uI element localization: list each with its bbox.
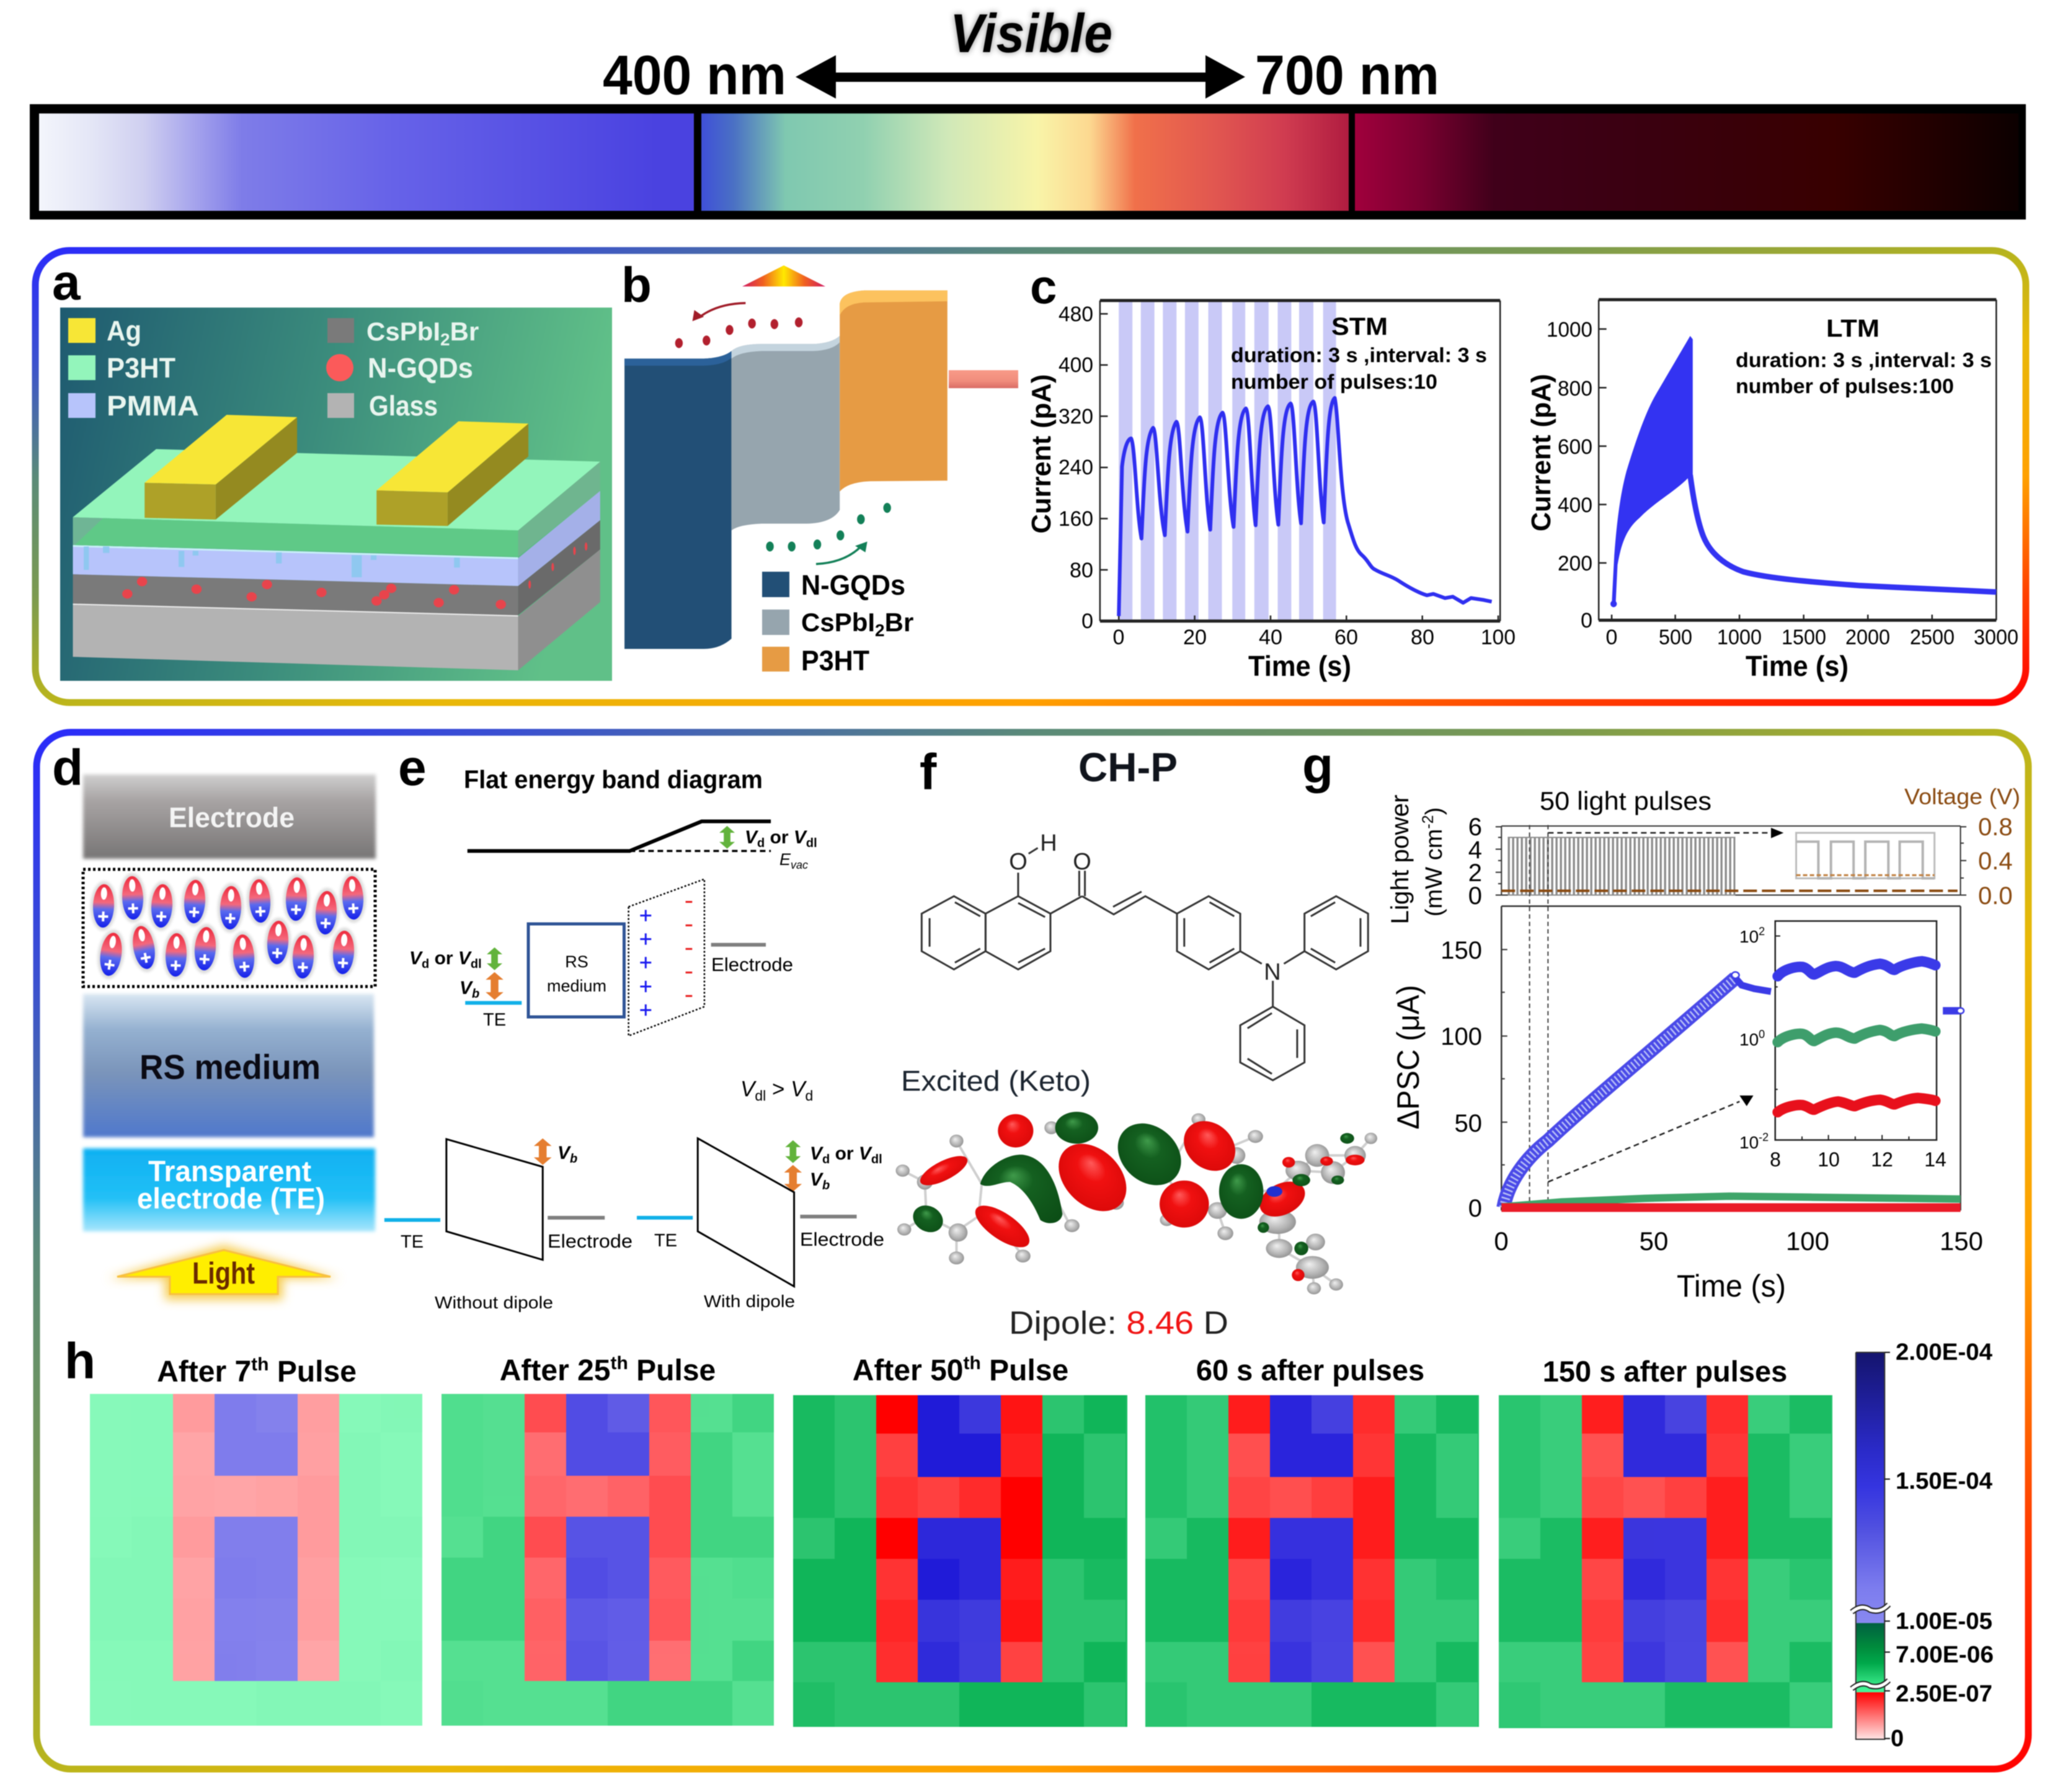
legend a: Br: [450, 317, 479, 346]
LTM chart: 800: [1558, 377, 1592, 401]
molecular structure: N: [1264, 959, 1281, 985]
light pulse chart: 4: [1468, 836, 1482, 864]
colour bar: 0: [1891, 1726, 1904, 1752]
label: Vd or Vdl left: V: [458, 948, 473, 969]
PSC chart: 50: [1640, 1226, 1668, 1256]
inset chart: 10: [1739, 1030, 1759, 1049]
icon: light arrow: [109, 1245, 339, 1300]
label: Vd or Vdl top: V: [794, 827, 808, 848]
inset chart: 14: [1924, 1148, 1946, 1171]
label: RS medium: RS: [565, 952, 588, 971]
legend a: [68, 315, 479, 422]
colour bar: 1.50E-04: [1896, 1468, 1992, 1494]
colour bar: 7.00E-06: [1896, 1642, 1994, 1668]
label: medium: medium: [547, 977, 606, 995]
LTM chart: 500: [1659, 626, 1692, 649]
LTM chart: 400: [1558, 494, 1592, 517]
label: Vdl > Vd: d: [806, 1088, 813, 1104]
legend b: Br: [885, 608, 913, 637]
heatmap: after 7th pulse: After 7: [157, 1355, 251, 1388]
title: Visible: Visible: [950, 2, 1112, 64]
label: Vd or Vdl top: d: [757, 836, 765, 850]
LTM chart: 600: [1558, 435, 1592, 459]
STM chart: Current (pA): [1026, 375, 1057, 533]
legend b: CsPbI: [801, 608, 875, 637]
label: Excited (Keto): Excited (Keto): [901, 1065, 1091, 1097]
heatmap: 60 s after pulses: 60 s after pulses: [1196, 1354, 1424, 1386]
LTM chart: LTM: [1826, 315, 1880, 342]
legend a: Glass: [369, 390, 438, 422]
legend b: N-GQDs: [801, 569, 905, 601]
LTM chart: Time (s): [1746, 650, 1849, 682]
spectrum bar: [30, 104, 2026, 220]
panel h: heatmaps: [64, 1333, 1994, 1752]
molecular structure: O: [1073, 849, 1091, 875]
spectrum header: [30, 2, 2026, 220]
panel frame: d-h: [37, 732, 2028, 1769]
PSC chart: 150: [1940, 1226, 1983, 1256]
heatmap: 150 s after pulses: 150 s after pulses: [1543, 1355, 1787, 1388]
STM chart: 480: [1059, 303, 1093, 326]
layer: electrode: [83, 774, 376, 859]
STM chart: [1026, 301, 1516, 682]
legend b: 2: [875, 621, 885, 640]
label: Vd or Vdl right: d: [822, 1153, 830, 1166]
layer: transparent electrode: [83, 1148, 375, 1231]
PSC chart: [1391, 825, 1983, 1303]
layer: transparent electrode: electrode (TE): [137, 1182, 325, 1215]
title: CH-P: CH-P: [1078, 744, 1178, 790]
light pulse chart: Light power: [1387, 794, 1414, 925]
LTM chart: 1000: [1547, 318, 1592, 342]
inset chart: 10: [1818, 1148, 1840, 1171]
LTM chart: Current (pA): [1526, 374, 1556, 531]
LTM chart: 200: [1558, 552, 1592, 575]
label: Vb without dipole: b: [570, 1152, 577, 1166]
light pulse chart: (mW cm: [1421, 829, 1447, 916]
heading e: e: [398, 740, 427, 796]
heatmap: after 25th pulse: th: [610, 1353, 628, 1373]
light pulse chart: 0.4: [1978, 848, 2013, 875]
inset chart: -2: [1759, 1131, 1769, 1143]
panel b: band diagram: [621, 257, 1018, 676]
colour bar: 2.00E-04: [1896, 1339, 1992, 1365]
light beam stub: [949, 370, 1018, 388]
heading f: f: [920, 744, 937, 801]
label: 400 nm: 400 nm: [603, 45, 786, 107]
heatmap: after 50th pulse: After 50: [853, 1354, 964, 1387]
label: 700 nm: 700 nm: [1255, 45, 1439, 107]
layer: RS medium: [83, 994, 374, 1137]
STM chart: 80: [1411, 626, 1434, 649]
LTM chart: 2000: [1845, 626, 1890, 649]
PSC chart: Time (s): [1677, 1269, 1786, 1303]
label: Vd or Vdl top: or: [765, 827, 794, 848]
STM chart: STM: [1331, 313, 1388, 340]
inset chart: 12: [1871, 1148, 1893, 1171]
LTM chart: 1000: [1717, 626, 1762, 649]
inset chart: 0: [1759, 1028, 1765, 1040]
legend b: P3HT: [801, 645, 869, 676]
arrow: visible range: [796, 55, 1245, 99]
heatmap: after 7th pulse: [90, 1354, 422, 1726]
heatmap: 60 s after pulses: [1145, 1354, 1479, 1727]
heading h: h: [64, 1333, 95, 1390]
label: Vd or Vdl left: dl: [471, 957, 482, 971]
light pulse chart: 0.0: [1978, 882, 2013, 910]
heatmap: after 7th pulse: Pulse: [269, 1355, 357, 1388]
heatmap: after 50th pulse: [793, 1353, 1127, 1727]
STM chart: duration: 3 s ,interval: 3 s: [1231, 344, 1487, 366]
label: TE middle: TE: [483, 1010, 506, 1030]
label: TE left: TE: [401, 1232, 424, 1252]
label: Electrode right: Electrode: [800, 1228, 884, 1250]
heatmap: after 50th pulse: th: [964, 1353, 981, 1373]
heatmap: 150 s after pulses: [1499, 1355, 1832, 1728]
heatmap: after 50th pulse: Pulse: [981, 1354, 1068, 1387]
STM chart: 0: [1081, 610, 1093, 633]
inset chart: 2: [1759, 925, 1765, 938]
LTM chart: 3000: [1974, 626, 2018, 649]
3D device stack: [73, 415, 600, 670]
inset chart: 10: [1739, 1133, 1759, 1152]
LTM chart: 0: [1606, 626, 1617, 649]
heading b: b: [621, 257, 652, 313]
STM chart: 400: [1059, 353, 1093, 377]
STM chart: 60: [1334, 626, 1358, 649]
STM chart: 0: [1113, 626, 1124, 649]
STM chart: 320: [1059, 405, 1093, 428]
molecular structure: [921, 830, 1368, 1080]
STM chart: 160: [1059, 507, 1093, 531]
heatmap: after 25th pulse: After 25: [500, 1354, 610, 1387]
label: Vd or Vdl right: V: [859, 1143, 873, 1164]
diagram shapes: [384, 822, 856, 1287]
label: Vd or Vdl top: dl: [806, 836, 817, 850]
label: Evac: vac: [791, 859, 808, 871]
inset chart: [1739, 921, 1946, 1171]
label: Vd or Vdl right: or: [830, 1143, 859, 1164]
label: Vd or Vdl top: V: [745, 827, 759, 848]
light pulse chart: [1387, 784, 2020, 924]
STM chart: 240: [1059, 456, 1093, 479]
heatmap: after 25th pulse: [442, 1353, 774, 1726]
label: Vd or Vdl left: or: [429, 948, 458, 969]
light pulse chart: ): [1421, 807, 1447, 815]
light pulse chart: 2: [1468, 859, 1482, 887]
legend a: Ag: [107, 315, 141, 347]
device background: [60, 308, 612, 681]
label: Vd or Vdl right: V: [810, 1143, 824, 1164]
heading c: c: [1030, 259, 1057, 314]
light pulse chart: 50 light pulses: [1540, 786, 1711, 815]
layer: transparent electrode: Transparent: [148, 1155, 311, 1187]
STM chart: Time (s): [1248, 650, 1351, 682]
PSC chart: 100: [1440, 1023, 1482, 1050]
layer: RS medium: RS medium: [140, 1047, 321, 1086]
light pulse chart: 6: [1468, 814, 1482, 841]
panel g: PSC chart: [1302, 737, 2020, 1303]
label: Vd or Vdl left: d: [422, 957, 429, 971]
label: TE right: TE: [654, 1231, 677, 1251]
light pulse chart: 0.8: [1978, 814, 2013, 841]
caption: Without dipole: Without dipole: [435, 1293, 553, 1312]
heading: flat energy band diagram: Flat energy band diagram: [464, 765, 763, 794]
label: Vb left: V: [459, 978, 472, 998]
legend a: N-GQDs: [368, 352, 473, 384]
PSC chart: ΔPSC (μA): [1391, 985, 1426, 1130]
PSC chart: 0: [1468, 1195, 1482, 1222]
label: Vdl > Vd: V: [791, 1077, 807, 1101]
colour bar: [1852, 1339, 1994, 1752]
label: Vdl > Vd: V: [740, 1077, 757, 1101]
legend b: [762, 569, 913, 676]
label: Vdl > Vd: >: [766, 1077, 791, 1101]
STM chart: 40: [1259, 626, 1282, 649]
icon: light arrow: Light: [192, 1257, 255, 1290]
inset chart: 10: [1739, 927, 1759, 946]
label: Electrode left: Electrode: [548, 1230, 632, 1252]
heatmap: after 7th pulse: th: [251, 1354, 269, 1375]
colour bar: 2.50E-07: [1896, 1681, 1992, 1707]
heading d: d: [52, 740, 83, 796]
PSC chart: 100: [1786, 1226, 1829, 1256]
PSC chart: 150: [1440, 937, 1482, 964]
legend a: 2: [440, 330, 450, 349]
label: Vb left: b: [472, 987, 479, 1001]
LTM chart: [1526, 299, 2018, 682]
layer: dipoles: [83, 869, 375, 987]
energy bands: [624, 290, 948, 649]
LTM chart: 2500: [1910, 626, 1955, 649]
LTM chart: 0: [1581, 609, 1592, 632]
legend a: CsPbI: [366, 317, 440, 346]
molecular structure: H: [1040, 830, 1057, 856]
label: Electrode middle: Electrode: [711, 954, 793, 975]
panel d: device stack with dipoles: [52, 740, 376, 1300]
panel f: molecule: [895, 744, 1377, 1341]
LTM chart: duration: 3 s ,interval: 3 s: [1736, 348, 1992, 371]
STM chart: 20: [1183, 626, 1207, 649]
heading a: a: [52, 254, 81, 311]
label: Vdl > Vd: dl: [755, 1088, 766, 1104]
caption: With dipole: With dipole: [704, 1292, 795, 1311]
layer: electrode: Electrode: [169, 802, 295, 833]
label: dipole value: Dipole: 8.46 D: [1009, 1305, 1228, 1341]
PSC chart: 0: [1494, 1226, 1509, 1256]
label: Vb right: V: [810, 1169, 822, 1190]
heatmap: after 25th pulse: Pulse: [628, 1354, 716, 1387]
light pulse chart: 0: [1468, 882, 1482, 910]
LTM chart: number of pulses:100: [1736, 375, 1954, 397]
panel a: device structure: [52, 254, 612, 681]
inset chart: 8: [1770, 1148, 1781, 1171]
light pulse chart: Voltage (V): [1904, 784, 2020, 809]
label: Vd or Vdl left: V: [409, 948, 424, 969]
label: Vd or Vdl right: dl: [871, 1153, 882, 1166]
legend a: P3HT: [107, 352, 175, 384]
light triangle: [742, 265, 825, 286]
panel c: STM and LTM charts: [1026, 259, 2018, 682]
heading g: g: [1302, 737, 1333, 794]
label: Evac: E: [779, 850, 791, 869]
molecular structure: O: [1009, 849, 1028, 875]
STM chart: 100: [1481, 626, 1516, 649]
legend a: PMMA: [107, 390, 199, 422]
LTM chart: 1500: [1782, 626, 1826, 649]
label: Vb without dipole: V: [557, 1143, 570, 1163]
STM chart: number of pulses:10: [1231, 370, 1437, 393]
panel e: energy diagrams: [384, 740, 884, 1312]
orbital rendering: [895, 1112, 1377, 1294]
carrier dots and arrows: [675, 303, 891, 564]
STM chart: 80: [1070, 559, 1093, 582]
PSC chart: 50: [1455, 1110, 1482, 1137]
label: Vb right: b: [822, 1179, 830, 1192]
light pulse chart: -2: [1419, 815, 1437, 829]
panel frame: a-c: [35, 251, 2026, 703]
colour bar: 1.00E-05: [1896, 1608, 1992, 1635]
